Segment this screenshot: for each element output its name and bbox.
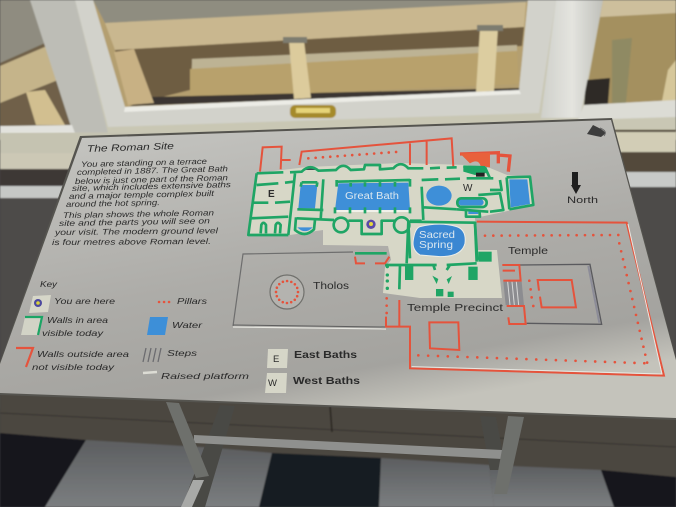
key: water [147,317,204,335]
room labels and water labels: Great Bath [345,191,399,202]
water: pools [297,168,530,231]
temple enclosure [386,222,664,376]
key: you are here: You are here [54,296,115,306]
tholos label: Tholos [313,281,349,292]
key: walls in area visible today [21,315,108,338]
room labels and water labels [268,183,473,251]
courtyard through left window [0,0,72,126]
intro text block: site, which includes extensive baths [72,180,231,193]
temple precinct features [355,222,492,297]
key: steps [143,348,198,362]
key: east baths: E [273,354,279,365]
temple steps [503,282,524,305]
intro text block [52,141,231,247]
temple precinct label: Temple Precinct [407,303,503,314]
intro text block: completed in 1887. The Great Bath [77,164,229,177]
temple label: Temple [508,246,549,257]
key: east baths: East Baths [294,350,358,361]
key: pillars: Pillars [177,296,208,306]
enclosure pillars [387,235,647,363]
room labels and water labels: Spring [419,239,453,251]
tholos [270,275,304,309]
intro text block: around the hot spring. [66,198,160,209]
wall below window [0,130,676,408]
panel heading: The Roman Site [87,141,174,155]
outside walls not visible [260,138,510,172]
left mullion [30,0,108,133]
key: water: Water [172,320,204,330]
intro text block: and a major temple complex built [69,189,215,201]
crown logo [587,125,606,137]
visible walls [248,164,533,260]
right mullion [541,0,603,118]
temple front pillars [529,281,533,306]
key heading: Key [40,279,58,289]
plan panel [0,118,676,420]
key: you are here [29,295,115,313]
key: walls in area visible today: visible today [42,328,104,338]
intro text block: is four metres above Roman level. [52,237,211,247]
key: steps: Steps [167,348,198,358]
room labels and water labels: E [268,189,275,200]
key: pillars [159,296,208,306]
key: west baths: W [268,378,277,389]
stand legs and crossbar [166,402,524,507]
courtyard through central window [93,0,528,107]
temple platform [520,264,602,324]
tholos raised platform [233,252,386,329]
enclosure wall [386,222,664,376]
sacred spring water [413,224,465,257]
key: west baths [265,373,361,393]
intro text block: This plan shows the whole Roman [63,208,215,220]
north arrow [571,172,581,194]
window handle [290,105,336,118]
you are here marker [366,220,376,229]
room labels and water labels: W [463,183,473,194]
key: walls outside area not visible today: Walls outside area [37,349,129,359]
north label: North [567,195,598,206]
intro text block: your visit. The modern ground level [54,226,218,237]
baths plan [248,138,533,260]
key [16,279,361,393]
intro text block: below is just one part of the Roman [75,173,229,186]
key: east baths [267,349,358,368]
ivory baths and precinct floor [248,163,533,298]
key: raised platform: Raised platform [161,371,249,381]
intro text block: site and the parts you will see on [59,216,211,228]
window and courtyard view [0,0,676,140]
room labels and water labels: Sacred [419,229,455,241]
key: walls outside area not visible today [16,348,129,372]
north pillars [308,152,400,158]
key: raised platform [143,371,249,381]
intro text block: You are standing on a terrace [81,157,208,169]
key: west baths: West Baths [293,376,361,387]
white window sash [75,0,556,127]
key: walls in area visible today: Walls in area [47,315,108,325]
floor and wall beneath the plan [0,390,676,507]
courtyard through right window [584,0,676,105]
key: walls outside area not visible today: not visible today [32,362,115,372]
temple porch and altar walls [429,265,576,350]
